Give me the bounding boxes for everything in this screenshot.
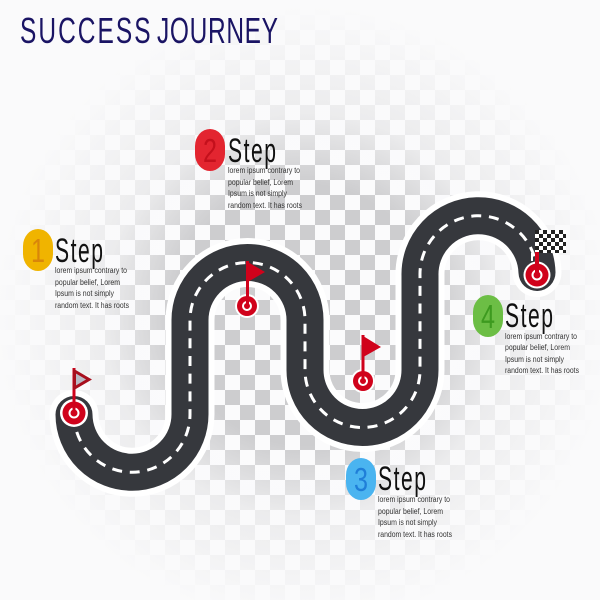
step 1 description: random text. It has roots (55, 301, 129, 310)
step 4 description: Ipsum is not simply (505, 355, 564, 364)
step 3 badge: 3 (354, 461, 368, 498)
step 1 description (55, 266, 129, 310)
marker 4: finish chequered flag (524, 230, 566, 288)
step 2 description: popular belief, Lorem (228, 178, 293, 187)
marker 1: start flag (60, 368, 89, 427)
step 3 description: random text. It has roots (378, 530, 452, 539)
step 4 description (505, 332, 579, 375)
step 2 description: lorem ipsum contrary to (228, 166, 301, 175)
step 4 label (473, 295, 579, 375)
step 3 description: popular belief, Lorem (378, 507, 443, 516)
step 2 description: Ipsum is not simply (228, 189, 287, 198)
step 4 heading: Step (505, 296, 555, 334)
marker 2: flag (235, 261, 265, 318)
title: SUCCESS (20, 10, 153, 51)
step 4 description: random text. It has roots (505, 366, 579, 375)
marker 3: flag (351, 335, 381, 393)
step 2 heading: Step (228, 131, 278, 169)
step 3 description: lorem ipsum contrary to (378, 495, 451, 504)
step 2 badge: 2 (203, 132, 217, 169)
winding road (74, 216, 537, 472)
title: JOURNEY (157, 10, 279, 51)
step 1 description: popular belief, Lorem (55, 278, 120, 287)
step 1 label (23, 229, 129, 310)
step 3 heading: Step (378, 459, 428, 497)
step 1 heading: Step (55, 231, 105, 269)
step 3 description: Ipsum is not simply (378, 518, 437, 527)
step 2 description: random text. It has roots (228, 201, 302, 210)
step 4 description: lorem ipsum contrary to (505, 332, 578, 341)
step 1 badge: 1 (31, 232, 45, 269)
step 4 description: popular belief, Lorem (505, 343, 570, 352)
step 2 label (195, 129, 302, 210)
step 4 badge: 4 (481, 298, 495, 335)
step 1 description: lorem ipsum contrary to (55, 266, 128, 275)
step 3 description (378, 495, 452, 539)
step 2 description (228, 166, 302, 210)
step 1 description: Ipsum is not simply (55, 289, 114, 298)
step 3 label (346, 458, 452, 539)
title (20, 10, 279, 51)
